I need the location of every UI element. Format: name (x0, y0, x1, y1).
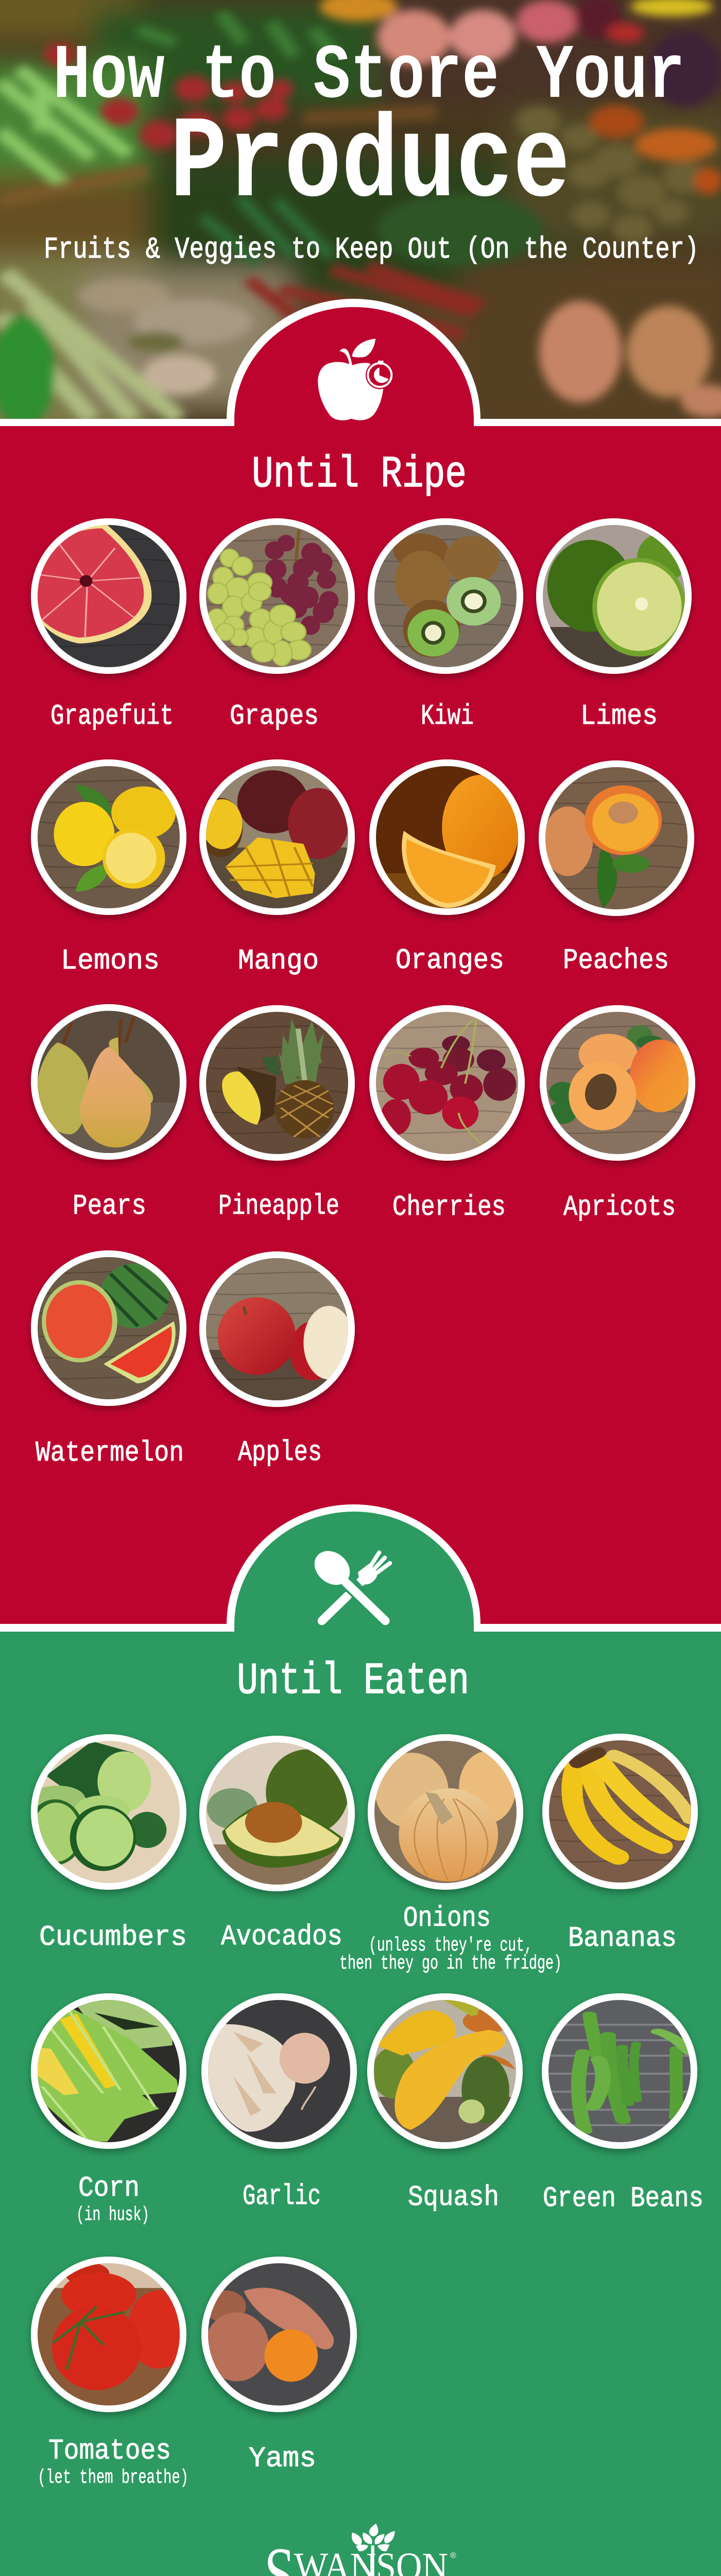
white divider band (0, 1624, 721, 1632)
photo: cherries (375, 1011, 519, 1155)
panel: until eaten section background (0, 1632, 721, 2576)
label: tomatoes with note: Tomatoes (48, 2434, 171, 2467)
label: grapefuit: Grapefuit (50, 700, 174, 733)
photo: green beans (547, 1999, 692, 2143)
label: pears: Pears (73, 1190, 146, 1223)
label: limes: Limes (580, 700, 658, 733)
label: onions with note: Onions (403, 1902, 491, 1935)
photo: kiwi (373, 524, 518, 668)
label: onions with note: (unless they're cut, (369, 1935, 533, 1957)
label: corn in husk: Corn (78, 2172, 140, 2205)
photo: apricots (545, 1011, 691, 1155)
photo: yams (204, 2262, 351, 2406)
photo: oranges (375, 765, 519, 909)
label: mango: Mango (238, 944, 319, 977)
photo: mango (199, 765, 349, 909)
item: cherries (369, 1005, 525, 1224)
photo: corn (29, 1999, 181, 2143)
label: apricots: Apricots (563, 1191, 676, 1224)
photo: cucumbers (27, 1740, 181, 1884)
photo: bananas (548, 1739, 692, 1884)
label: bananas: Bananas (568, 1922, 677, 1955)
label: watermelon: Watermelon (36, 1436, 184, 1469)
photo: lemons (37, 765, 181, 909)
photo: grapefruit (28, 524, 181, 668)
item: mango (199, 759, 355, 977)
item: pineapple (199, 1005, 355, 1223)
photo: avocados (205, 1741, 349, 1886)
item: apricots (540, 1005, 695, 1224)
label: tomatoes with note (38, 2434, 188, 2489)
photo: garlic (202, 1999, 351, 2143)
label: yams: Yams (249, 2442, 316, 2475)
photo: pears (36, 1010, 181, 1154)
item: onions (339, 1734, 562, 1975)
icon: apple with stopwatch (318, 338, 394, 420)
item: kiwi (368, 518, 523, 733)
label: peaches: Peaches (563, 944, 669, 977)
label: squash: Squash (408, 2181, 499, 2214)
item: bananas (542, 1734, 698, 1955)
label: lemons: Lemons (61, 944, 160, 977)
photo: tomatoes (37, 2262, 190, 2406)
label: grapes: Grapes (230, 700, 319, 733)
item: lemons (31, 759, 186, 977)
panel: until ripe section background (0, 426, 721, 1624)
title (53, 33, 685, 230)
icon: logo leaves (352, 2523, 395, 2576)
item: grapefruit (28, 518, 186, 733)
item: corn (29, 1993, 186, 2226)
item: squash (367, 1993, 523, 2214)
item: garlic (201, 1993, 357, 2213)
item: oranges (369, 759, 525, 977)
label: apples: Apples (238, 1436, 322, 1469)
label: oranges: Oranges (396, 944, 504, 977)
text: registered mark: ® (450, 2551, 456, 2560)
photo: grapes (205, 524, 349, 668)
hero background: blurred market produce (0, 0, 721, 440)
label: tomatoes with note: (let them breathe) (38, 2467, 188, 2489)
item: apples (199, 1251, 355, 1469)
label: kiwi: Kiwi (421, 700, 474, 733)
heading: until eaten: Until Eaten (237, 1656, 469, 1706)
photo: onions (373, 1740, 518, 1884)
photo: watermelon (37, 1256, 181, 1400)
item: peaches (539, 760, 694, 977)
title: Produce (170, 98, 570, 230)
label: pineapple: Pineapple (218, 1190, 339, 1223)
photo: peaches (543, 766, 689, 910)
label: onions with note: then they go in the fridge) (339, 1953, 562, 1975)
label: cucumbers: Cucumbers (39, 1921, 187, 1954)
item: avocados (199, 1736, 355, 1953)
item: pears (31, 1004, 186, 1223)
item: tomatoes (31, 2257, 190, 2489)
icon: spoon and fork (308, 1544, 390, 1621)
logo: swanson health products (264, 2523, 456, 2576)
item: yams (201, 2257, 357, 2475)
heading: until ripe: Until Ripe (252, 449, 467, 500)
item: grapes (199, 518, 355, 733)
arch: until ripe badge (227, 299, 480, 427)
photo: limes (542, 524, 688, 668)
photo: apples (205, 1257, 354, 1401)
item: watermelon (31, 1250, 186, 1469)
white divider band (0, 419, 721, 426)
item: limes (536, 518, 692, 733)
arch: until eaten badge (227, 1504, 480, 1632)
photo: squash (372, 1999, 517, 2143)
item: green beans (542, 1993, 703, 2215)
label: onions with note (339, 1902, 562, 1975)
label: avocados: Avocados (221, 1920, 342, 1953)
label: corn in husk: (in husk) (76, 2204, 149, 2226)
label: corn in husk (76, 2172, 149, 2226)
label: cherries: Cherries (392, 1191, 506, 1224)
photo: pineapple (205, 1011, 349, 1155)
label: garlic: Garlic (243, 2180, 321, 2213)
item: cucumbers (27, 1734, 187, 1954)
